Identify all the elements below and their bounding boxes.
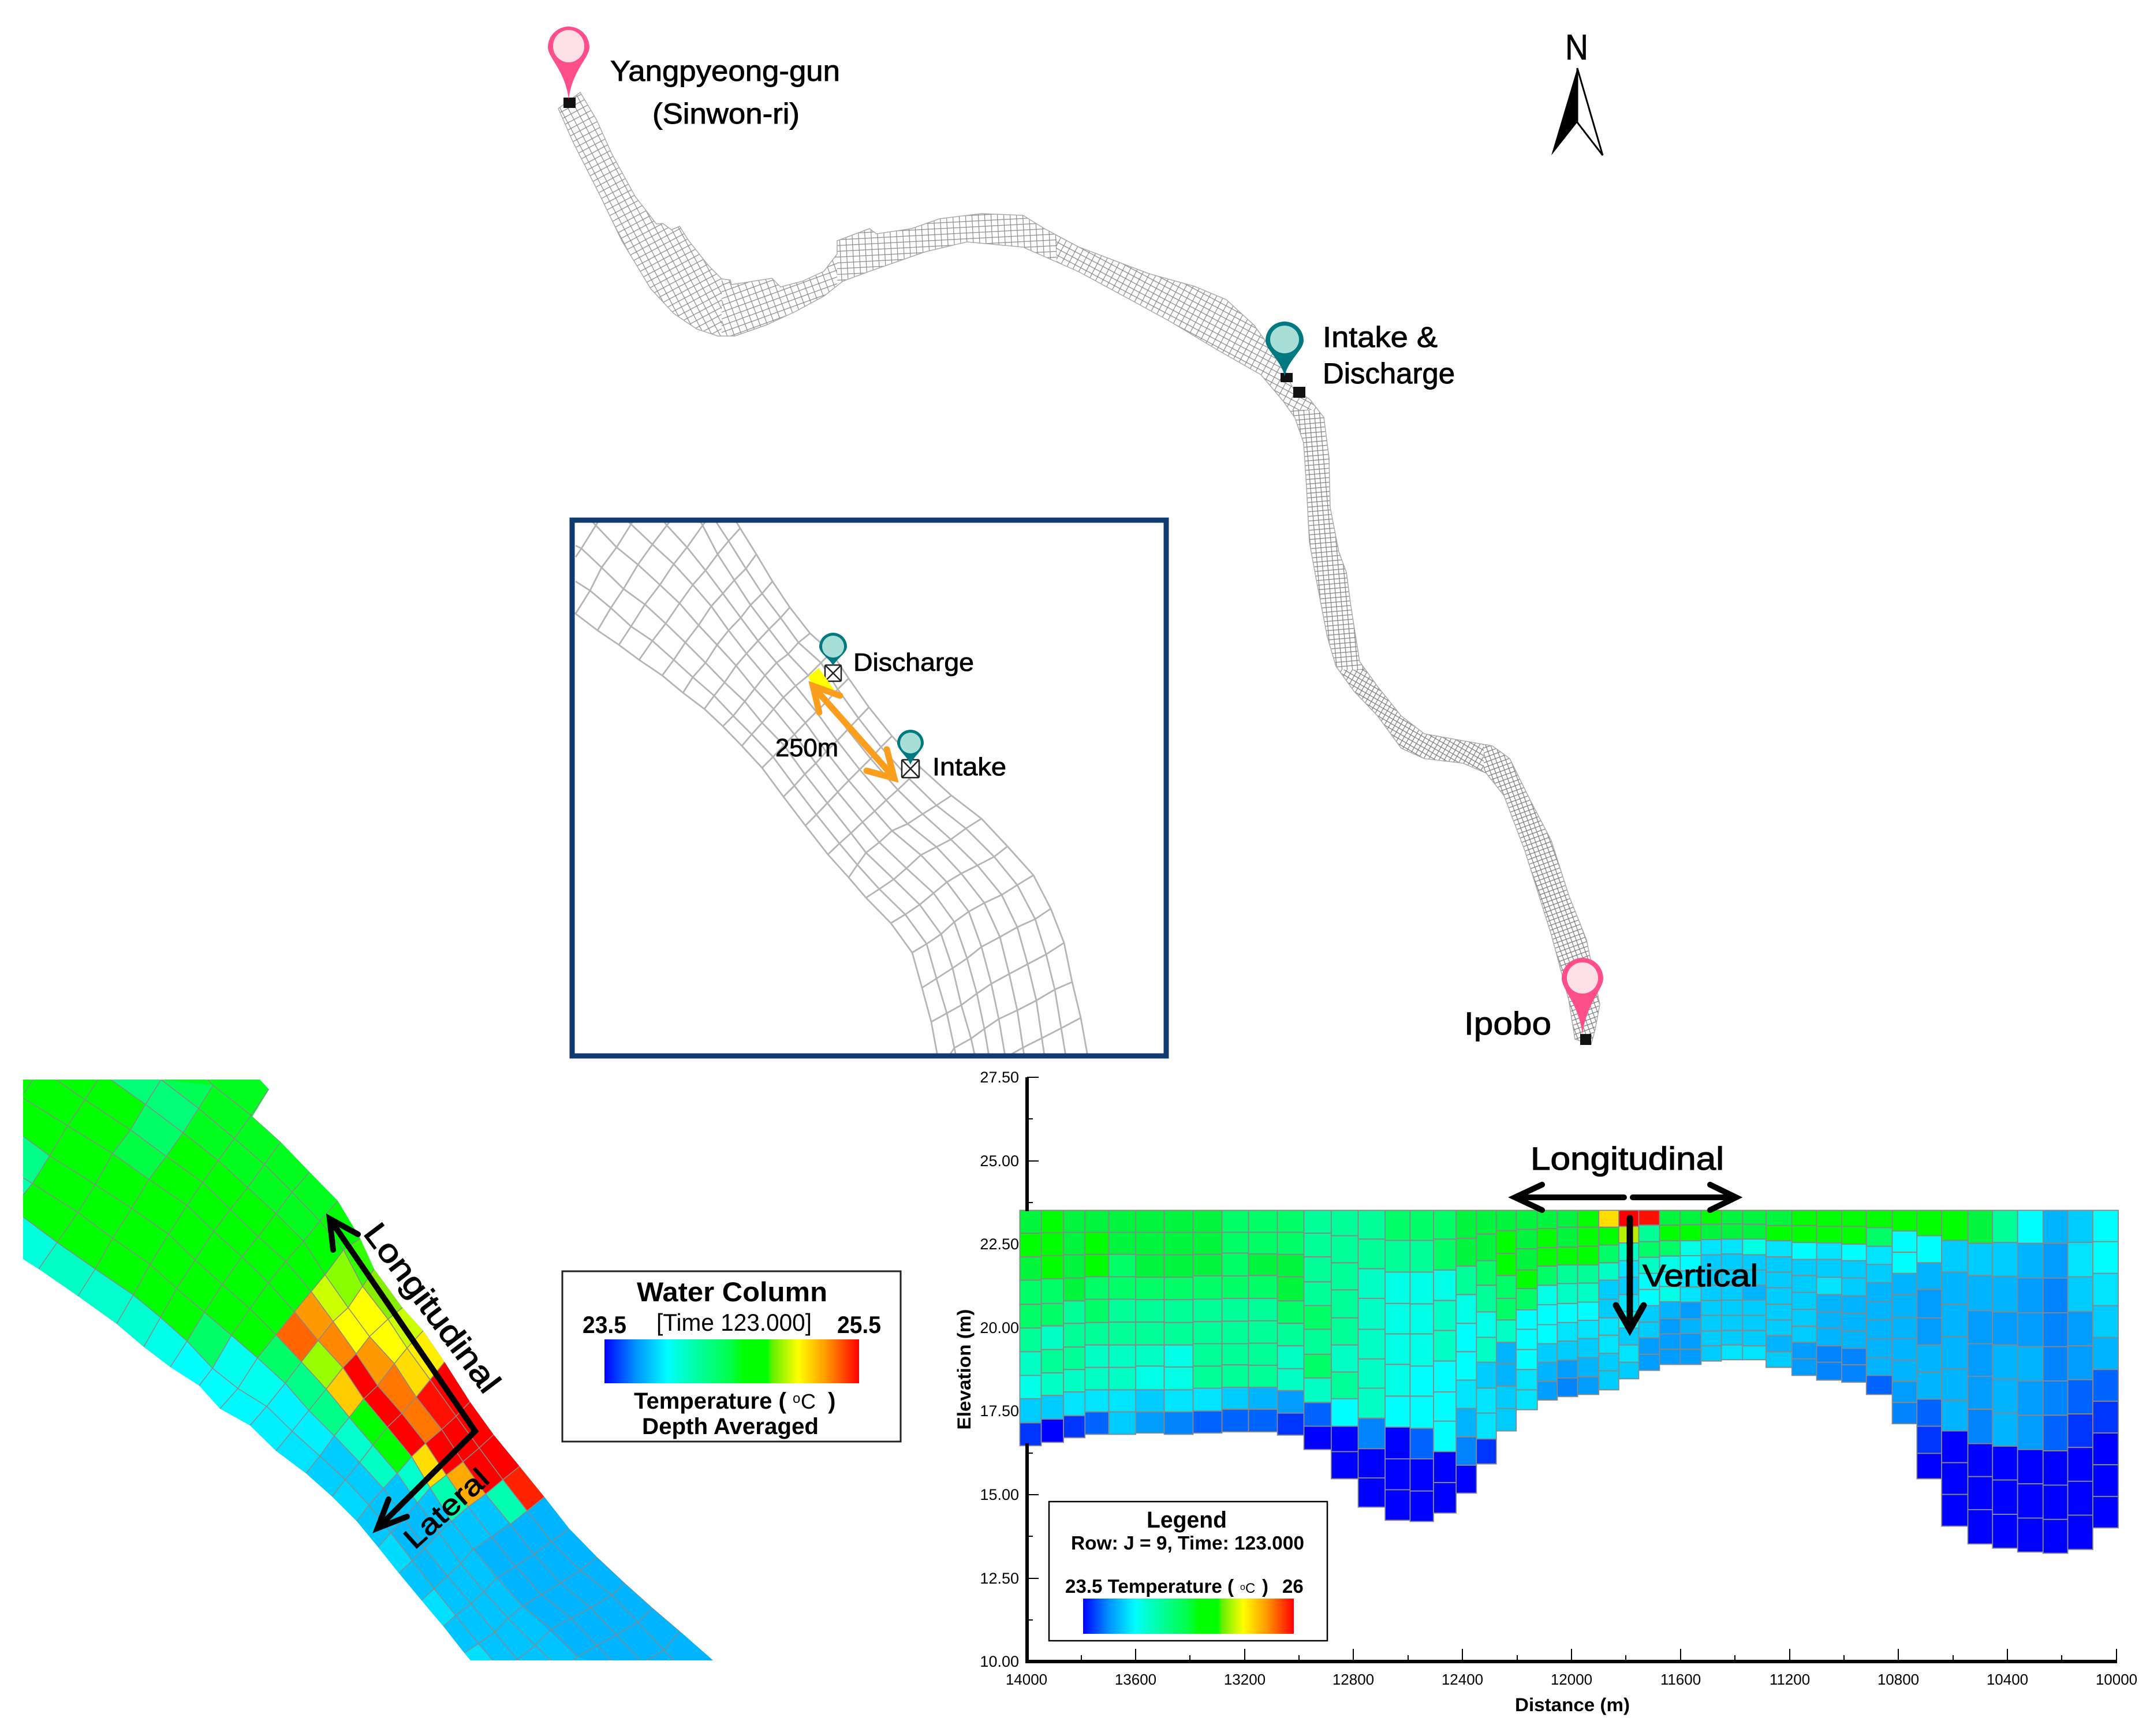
x tick labels: 12000 (1551, 1671, 1592, 1688)
y tick labels: 20.00 (980, 1319, 1019, 1336)
y axis (1027, 1077, 1039, 1663)
label: Longitudinal: Longitudinal (1531, 1140, 1724, 1177)
legend subtitle: Row: J = 9, Time: 123.000 (1071, 1532, 1304, 1554)
intake marker box (902, 760, 919, 778)
x tick labels (1006, 1671, 2137, 1688)
colour bar (1083, 1599, 1294, 1634)
legend: cross-section (1049, 1502, 1327, 1641)
discharge plume cell (808, 668, 834, 690)
legend title: Legend (1147, 1507, 1227, 1533)
x axis (1025, 1649, 2117, 1662)
legend title: Water Column (637, 1276, 827, 1307)
arrow: longitudinal left (1515, 1185, 1624, 1210)
icon: teal pin intake and discharge (1266, 322, 1304, 376)
legend scale label: 23.5 Temperature ( (1065, 1576, 1234, 1597)
x axis title: Distance (m) (1515, 1694, 1630, 1715)
boundary marker: Ipobo (1580, 1034, 1591, 1045)
x tick labels: 12800 (1332, 1671, 1374, 1688)
x tick labels: 11200 (1770, 1671, 1810, 1688)
panel: depth-averaged temperature map (23, 1080, 713, 1660)
x tick labels: 10000 (2096, 1671, 2137, 1688)
x tick labels: 14000 (1006, 1671, 1047, 1688)
colour bar (604, 1339, 859, 1383)
legend: water column (562, 1271, 901, 1442)
arrow: longitudinal and lateral (330, 1219, 475, 1528)
arrow: longitudinal right (1633, 1185, 1736, 1210)
mesh grid lines (23, 1074, 690, 1677)
label: Longitudinal: Longitudinal (357, 1216, 508, 1399)
y tick labels: 22.50 (980, 1235, 1019, 1253)
legend unit: o (793, 1391, 800, 1406)
legend unit: ) (822, 1388, 835, 1414)
legend scale label: C (1245, 1581, 1255, 1596)
label: Intake &: Intake & (1323, 321, 1438, 353)
icon: north arrow (1551, 28, 1603, 155)
x tick labels: 13600 (1115, 1671, 1156, 1688)
label: Vertical: Vertical (1643, 1259, 1758, 1293)
legend time: [Time 123.000] (656, 1309, 812, 1336)
y tick labels: 12.50 (980, 1570, 1019, 1587)
x tick labels: 12400 (1442, 1671, 1483, 1688)
label: Ipobo: Ipobo (1464, 1005, 1551, 1041)
legend maximum: 25.5 (837, 1311, 881, 1338)
inset grid (568, 514, 1088, 1059)
x tick labels: 10800 (1877, 1671, 1919, 1688)
legend scale label: 26 (1282, 1576, 1304, 1597)
panel: inset mesh (568, 514, 1166, 1059)
icon: north arrow: N (1565, 28, 1588, 68)
x tick labels: 13200 (1224, 1671, 1266, 1688)
y tick labels: 15.00 (980, 1486, 1019, 1503)
legend minimum: 23.5 (583, 1311, 626, 1338)
y axis title: Elevation (m) (954, 1309, 975, 1429)
legend unit: Temperature ( (634, 1388, 786, 1414)
river mesh map (520, 58, 1617, 1056)
discharge marker box (825, 665, 841, 681)
boundary marker: discharge (1293, 387, 1305, 398)
icon: discharge pin (819, 633, 847, 666)
legend scale label: o (1240, 1582, 1245, 1592)
label: Discharge: Discharge (1323, 357, 1455, 390)
chart: elevation cross-section (954, 1069, 2137, 1715)
boundary marker: upstream (563, 98, 576, 108)
x tick labels: 10400 (1987, 1671, 2028, 1688)
cross-section cells right (1537, 1210, 2118, 1553)
hot plume cells (276, 1312, 318, 1362)
label: Intake: Intake (932, 753, 1006, 781)
y tick labels: 10.00 (980, 1653, 1019, 1670)
arrow: vertical (1616, 1218, 1644, 1330)
y tick labels: 27.50 (980, 1069, 1019, 1086)
icon: intake pin (897, 730, 924, 765)
boundary marker: intake (1281, 373, 1293, 382)
legend unit: C (801, 1390, 816, 1413)
label: Sinwon-ri: (Sinwon-ri) (652, 98, 800, 130)
arrow: 250 m distance (813, 686, 894, 778)
label: Yangpyeong-gun: Yangpyeong-gun (610, 55, 840, 87)
legend scale label: ) (1262, 1576, 1268, 1597)
label: Discharge: Discharge (853, 648, 974, 677)
cross-section cells left (1020, 1210, 1537, 1521)
legend depth note: Depth Averaged (642, 1414, 819, 1439)
y tick labels: 25.00 (980, 1152, 1019, 1170)
x tick labels: 11600 (1660, 1671, 1701, 1688)
inset frame (572, 520, 1166, 1056)
label: 250m: 250m (775, 734, 838, 762)
icon: pink pin Ipobo (1562, 958, 1603, 1035)
y tick labels: 17.50 (980, 1402, 1019, 1420)
label: Lateral: Lateral (397, 1462, 495, 1555)
y tick labels (980, 1069, 1019, 1670)
icon: pink pin Yangpyeong-gun (548, 27, 589, 99)
